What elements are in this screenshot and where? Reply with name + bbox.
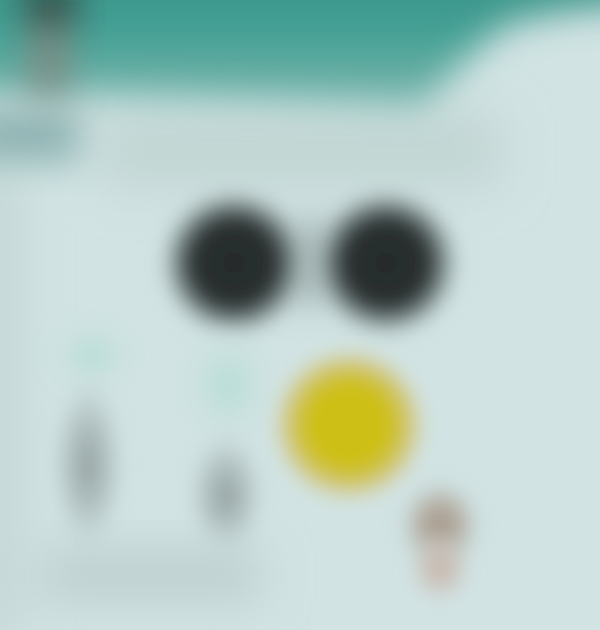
icon: brown figure top <box>396 477 484 573</box>
icon: yellow circle <box>267 343 431 507</box>
icon: left black circle <box>154 183 314 343</box>
icon: middle grey figure <box>184 427 268 563</box>
panel: lower body shading <box>40 550 260 600</box>
panel: muted upper left block <box>0 108 80 163</box>
panel: top teal header band <box>0 0 600 105</box>
icon: pink figure bottom <box>406 530 474 606</box>
connector between circles <box>290 225 330 300</box>
icon: dark figure in header <box>26 0 76 94</box>
panel: grey-green body shading <box>0 115 500 630</box>
icon: left tall grey figure <box>48 370 128 560</box>
icon: mint highlight above left figure <box>44 315 140 395</box>
icon: mint highlight above middle figure <box>178 323 278 447</box>
icon: right black circle <box>306 183 466 343</box>
